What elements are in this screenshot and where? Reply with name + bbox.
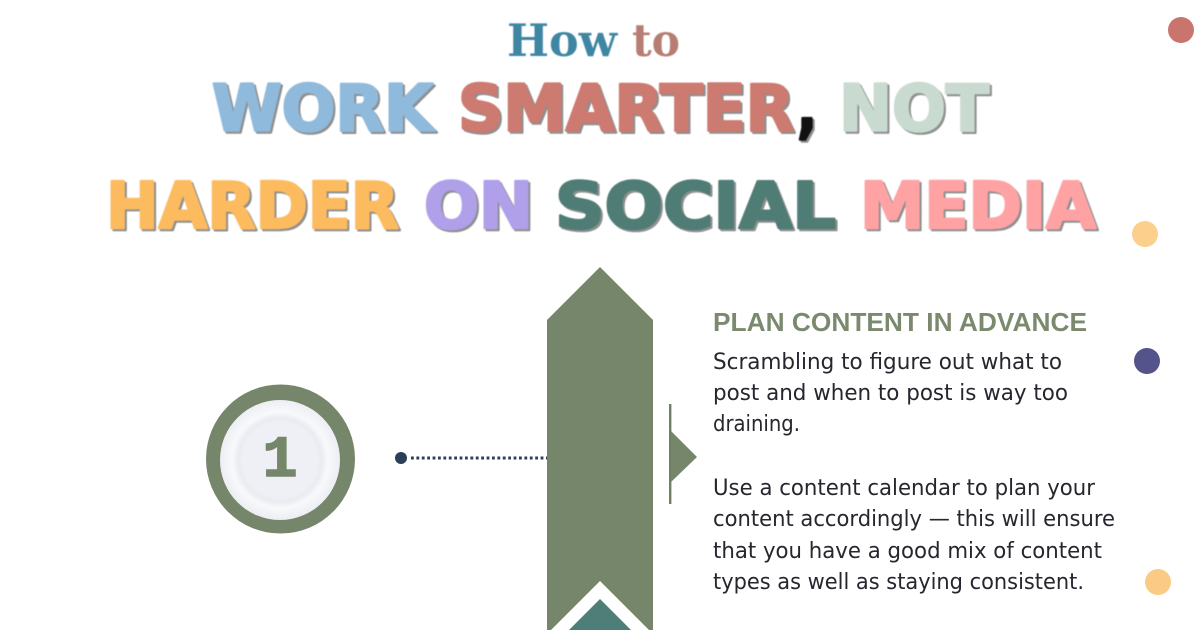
step text: problem: draining. (713, 412, 800, 437)
step text: solution: types as well as staying consistent. (713, 570, 1084, 595)
title: Work Smarter, Not (212, 72, 989, 146)
number badge: 1 (263, 429, 297, 494)
central arrow banner (547, 267, 653, 630)
number badge (206, 384, 355, 534)
title: Harder on Social Media: ON (424, 170, 533, 244)
decorative dot: indigo (1134, 348, 1160, 374)
pointer marker (669, 404, 697, 504)
title: Harder on Social Media: MEDIA (860, 170, 1096, 244)
title: How to: How (507, 14, 618, 67)
title: Work Smarter, Not: SMARTER (458, 72, 794, 146)
step text: solution: that you have a good mix of content (713, 539, 1102, 564)
decorative dot: red (1168, 17, 1194, 43)
step text: problem: Scrambling to figure out what to (713, 350, 1062, 375)
step text: problem (713, 350, 1068, 437)
title: Work Smarter, Not: WORK (212, 72, 435, 146)
decorative dot: light orange (1132, 221, 1158, 247)
step heading: PLAN CONTENT IN ADVANCE (713, 307, 1087, 337)
dotted connector (395, 452, 547, 464)
title: How to: to (632, 14, 680, 67)
title: How to (507, 14, 680, 67)
step text: solution: Use a content calendar to plan your (713, 476, 1096, 501)
step text: solution (713, 476, 1115, 595)
title: Harder on Social Media: HARDER (106, 170, 399, 244)
title: Work Smarter, Not: , (797, 72, 817, 146)
step text: problem: post and when to post is way too (713, 381, 1068, 406)
title: Work Smarter, Not: NOT (839, 72, 989, 146)
title: Harder on Social Media (106, 170, 1096, 244)
chevron notch with next arrow (551, 581, 649, 630)
decorative dot: orange (1145, 569, 1171, 595)
title: Harder on Social Media: SOCIAL (555, 170, 836, 244)
step text: solution: content accordingly — this will ensure (713, 507, 1115, 532)
